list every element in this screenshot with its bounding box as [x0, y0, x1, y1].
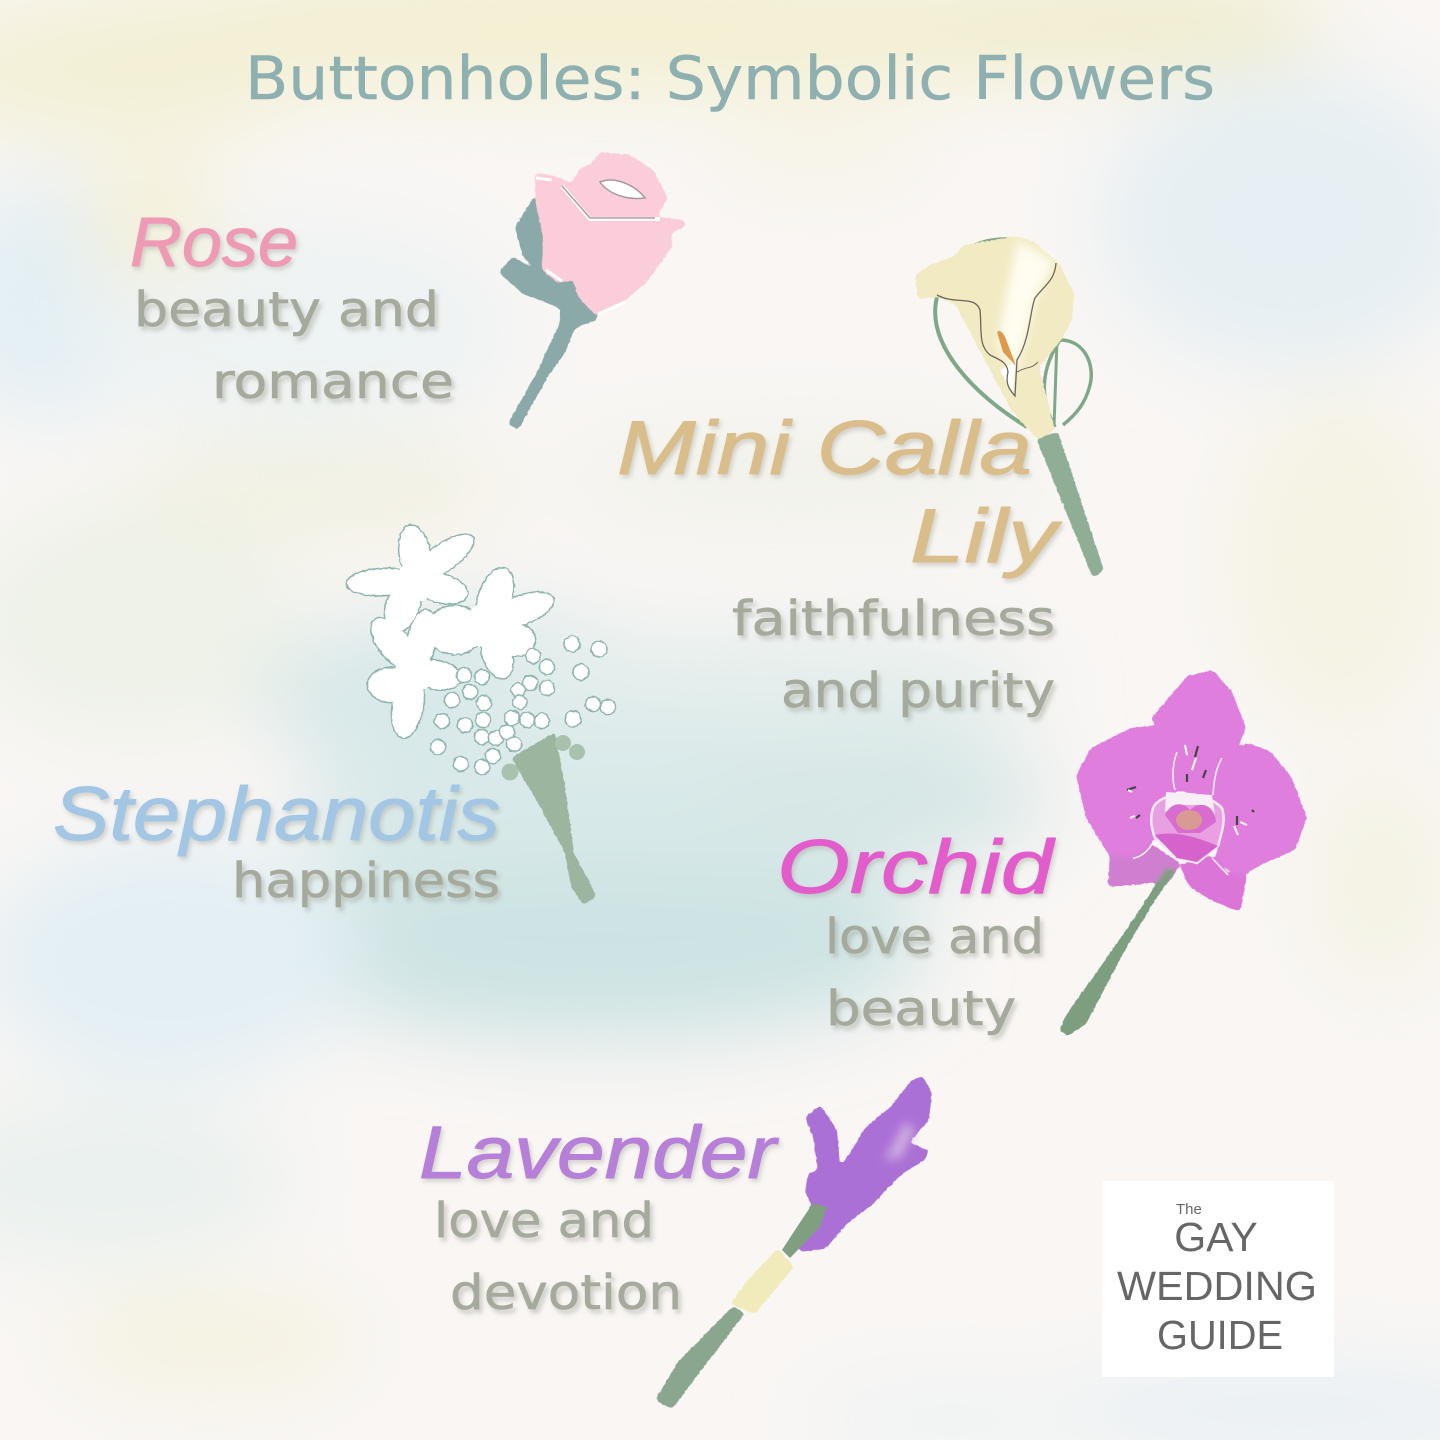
label: mini calla lily: Mini Calla — [617, 406, 1032, 491]
flower: mini calla lily — [915, 236, 1104, 578]
label: mini calla lily: faithfulness — [732, 591, 1055, 647]
label: lavender: love and — [434, 1193, 654, 1249]
label: rose — [130, 203, 454, 410]
label: mini calla lily: Lily — [910, 494, 1062, 579]
flower: orchid — [1059, 670, 1307, 1036]
logo: The Gay Wedding Guide: GAY — [1174, 1214, 1258, 1260]
logo: The Gay Wedding Guide: GUIDE — [1157, 1312, 1283, 1358]
title: Buttonholes: Symbolic Flowers — [245, 44, 1215, 114]
flower: rose — [498, 152, 685, 430]
label: stephanotis — [53, 772, 500, 909]
logo: The Gay Wedding Guide — [1102, 1181, 1334, 1377]
label: lavender: Lavender — [419, 1111, 780, 1194]
label: orchid: Orchid — [777, 825, 1056, 910]
label: mini calla lily: and purity — [781, 663, 1055, 719]
label: rose: beauty and — [134, 282, 439, 338]
logo: The Gay Wedding Guide: WEDDING — [1117, 1263, 1317, 1309]
label: orchid — [777, 825, 1056, 1037]
label: orchid: beauty — [826, 981, 1016, 1037]
label: mini calla lily — [617, 406, 1062, 719]
label: lavender: devotion — [450, 1265, 682, 1321]
label: stephanotis: Stephanotis — [53, 772, 500, 857]
logo: The Gay Wedding Guide: The — [1176, 1201, 1202, 1218]
flower: lavender — [655, 1075, 932, 1409]
flower: stephanotis — [346, 523, 616, 905]
label: rose: romance — [212, 354, 454, 410]
label: rose: Rose — [130, 203, 298, 281]
label: stephanotis: happiness — [232, 853, 500, 909]
label: lavender — [419, 1111, 780, 1321]
label: orchid: love and — [825, 909, 1044, 965]
